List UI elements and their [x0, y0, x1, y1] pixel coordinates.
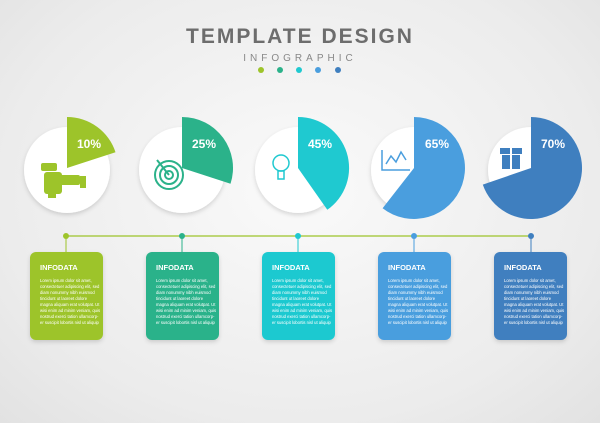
box 2: er suscipit lobortis nisl ut aliquip	[156, 320, 216, 325]
box 1: consectetuer adipiscing elit, sed	[40, 284, 100, 289]
pie 65%	[371, 117, 465, 219]
box 3: tincidunt ut laoreet dolore	[272, 296, 320, 301]
box 3: consectetuer adipiscing elit, sed	[272, 284, 332, 289]
box 1: INFODATA	[40, 263, 78, 272]
icon: bulb	[273, 155, 289, 179]
box 5: tincidunt ut laoreet dolore	[504, 296, 552, 301]
icon: handshake	[41, 163, 86, 198]
box 5: nostrud exerci tation ullamcorp-	[504, 314, 563, 319]
box 3	[262, 252, 335, 340]
box 1: Lorem ipsum dolor sit amet,	[40, 278, 92, 283]
box 1: diam nonummy nibh euismod	[40, 290, 95, 295]
box 3: nostrud exerci tation ullamcorp-	[272, 314, 331, 319]
title: TEMPLATE DESIGN	[186, 25, 414, 48]
box 4: er suscipit lobortis nisl ut aliquip	[388, 320, 448, 325]
pie 70%	[483, 117, 582, 219]
box 4	[378, 252, 451, 340]
pie 25%	[139, 117, 233, 213]
box 5: wisi enim ad minim veniam, quis	[504, 308, 564, 313]
color dots	[258, 67, 341, 73]
pie 70%: 70%	[541, 137, 565, 151]
box 1: tincidunt ut laoreet dolore	[40, 296, 88, 301]
box 4: INFODATA	[388, 263, 426, 272]
box 3: er suscipit lobortis nisl ut aliquip	[272, 320, 332, 325]
box 1: wisi enim ad minim veniam, quis	[40, 308, 100, 313]
box 2	[146, 252, 219, 340]
box 3: magna aliquam erat volutpat. Ut	[272, 302, 332, 307]
box 3: wisi enim ad minim veniam, quis	[272, 308, 332, 313]
box 5	[494, 252, 567, 340]
box 4: diam nonummy nibh euismod	[388, 290, 443, 295]
pie 10%	[24, 117, 116, 213]
box 5: Lorem ipsum dolor sit amet,	[504, 278, 556, 283]
box 2: consectetuer adipiscing elit, sed	[156, 284, 216, 289]
box 5: INFODATA	[504, 263, 542, 272]
box 2: magna aliquam erat volutpat. Ut	[156, 302, 216, 307]
box 1: nostrud exerci tation ullamcorp-	[40, 314, 99, 319]
box 4: nostrud exerci tation ullamcorp-	[388, 314, 447, 319]
box 4: tincidunt ut laoreet dolore	[388, 296, 436, 301]
pie 45%: 45%	[308, 137, 332, 151]
box 2: Lorem ipsum dolor sit amet,	[156, 278, 208, 283]
box 4: consectetuer adipiscing elit, sed	[388, 284, 448, 289]
box 4: Lorem ipsum dolor sit amet,	[388, 278, 440, 283]
box 4: wisi enim ad minim veniam, quis	[388, 308, 448, 313]
pie 10%: 10%	[77, 137, 101, 151]
box 2: tincidunt ut laoreet dolore	[156, 296, 204, 301]
box 2: nostrud exerci tation ullamcorp-	[156, 314, 215, 319]
icon: chart	[382, 150, 410, 170]
pie 25%: 25%	[192, 137, 216, 151]
icon: target	[155, 160, 183, 189]
box 1	[30, 252, 103, 340]
box 3: INFODATA	[272, 263, 310, 272]
box 1: er suscipit lobortis nisl ut aliquip	[40, 320, 100, 325]
box 5: consectetuer adipiscing elit, sed	[504, 284, 564, 289]
box 5: magna aliquam erat volutpat. Ut	[504, 302, 564, 307]
box 2: INFODATA	[156, 263, 194, 272]
box 4: magna aliquam erat volutpat. Ut	[388, 302, 448, 307]
timeline	[63, 233, 534, 252]
box 1: magna aliquam erat volutpat. Ut	[40, 302, 100, 307]
box 3: diam nonummy nibh euismod	[272, 290, 327, 295]
box 5: er suscipit lobortis nisl ut aliquip	[504, 320, 564, 325]
box 3: Lorem ipsum dolor sit amet,	[272, 278, 324, 283]
pie 65%: 65%	[425, 137, 449, 151]
subtitle: INFOGRAPHIC	[243, 53, 357, 64]
box 2: diam nonummy nibh euismod	[156, 290, 211, 295]
icon: gift	[500, 148, 522, 169]
box 5: diam nonummy nibh euismod	[504, 290, 559, 295]
pie 45%	[255, 117, 349, 213]
box 2: wisi enim ad minim veniam, quis	[156, 308, 216, 313]
